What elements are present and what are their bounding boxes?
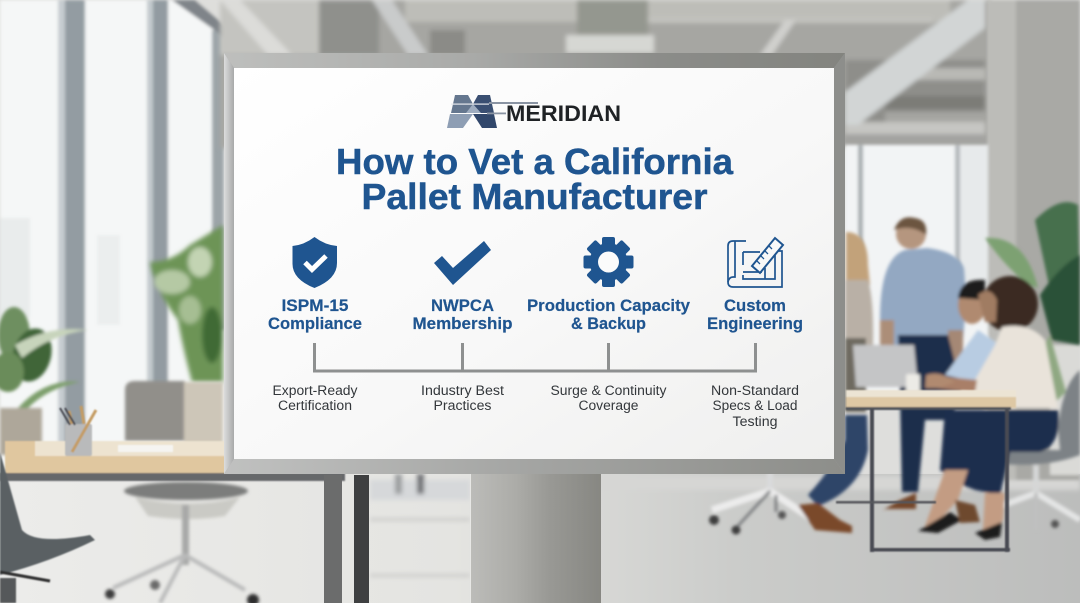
- title: How to Vet a California: [336, 141, 734, 182]
- back plant and chair: [125, 225, 223, 452]
- column: ISPM-15 Compliance: [268, 237, 362, 413]
- heading: ISPM-15 Compliance: ISPM-15: [282, 296, 348, 315]
- logo mark: [447, 95, 538, 128]
- description: Export-Ready Certification: [272, 383, 358, 413]
- standing man: [880, 217, 965, 510]
- description: Industry Best Practices: Industry Best: [421, 383, 504, 398]
- description: Non-Standard Specs and Load Testing: [711, 383, 799, 429]
- heading: Production Capacity and Backup: [527, 296, 691, 333]
- logo wordmark: MERIDIAN: [506, 101, 621, 126]
- logo: Meridian: [447, 95, 621, 128]
- left desk with pencil cup: [0, 406, 369, 603]
- title: Pallet Manufacturer: [362, 176, 708, 217]
- heading: NWPCA Membership: [412, 296, 512, 333]
- heading: Custom Engineering: Custom: [724, 296, 786, 315]
- foreground chair: [0, 452, 95, 603]
- description: Non-Standard Specs and Load Testing: Non-Standard: [711, 383, 799, 398]
- ceiling: [220, 0, 990, 148]
- heading: Production Capacity and Backup: Production Capacity: [527, 296, 691, 315]
- woman left: [846, 232, 870, 285]
- description: Industry Best Practices: Practices: [434, 398, 492, 413]
- display frame: [224, 53, 845, 474]
- seated man: [958, 286, 986, 324]
- screen panel: [234, 68, 834, 459]
- seated woman: [982, 276, 1038, 332]
- meeting table: [836, 390, 1016, 552]
- right chair: [985, 370, 1080, 465]
- left windows: [0, 0, 240, 535]
- description: Surge and Continuity Coverage: Coverage: [578, 398, 638, 413]
- icon: check mark: [434, 241, 491, 285]
- connector bracket: [314, 343, 756, 371]
- description: Export-Ready Certification: Export-Ready: [272, 383, 358, 398]
- icon: gear: [584, 237, 634, 287]
- heading: ISPM-15 Compliance: Compliance: [268, 314, 362, 333]
- heading: NWPCA Membership: NWPCA: [431, 296, 494, 315]
- column: NWPCA Membership: [412, 241, 512, 413]
- description: Non-Standard Specs and Load Testing: Testing: [732, 414, 778, 429]
- heading: ISPM-15 Compliance: [268, 296, 362, 333]
- description: Surge and Continuity Coverage: Surge & Continuity: [550, 383, 667, 398]
- heading: Production Capacity and Backup: & Backup: [571, 314, 646, 333]
- meeting group: [709, 202, 1080, 552]
- description: Export-Ready Certification: Certification: [278, 398, 352, 413]
- description: Surge and Continuity Coverage: [550, 383, 667, 413]
- right windows and column: [845, 0, 1080, 480]
- title: [336, 141, 734, 217]
- heading: Custom Engineering: Engineering: [707, 314, 803, 333]
- desk legs: [324, 475, 342, 603]
- icon: shield with check: [292, 237, 337, 288]
- floor: [0, 474, 1080, 603]
- heading: NWPCA Membership: Membership: [412, 314, 512, 333]
- stool: [105, 482, 259, 603]
- heading: Custom Engineering: [707, 296, 803, 333]
- column: Custom Engineering: [707, 238, 803, 429]
- display stand post: [470, 474, 601, 603]
- description: Non-Standard Specs and Load Testing: Specs & Load: [712, 398, 798, 413]
- far chair base: [767, 472, 773, 490]
- left plant in pot: [0, 307, 88, 455]
- right plant: [985, 202, 1080, 405]
- column: Production Capacity and Backup: [527, 237, 691, 413]
- laptop: [853, 345, 918, 387]
- description: Industry Best Practices: [421, 383, 504, 413]
- icon: blueprint and ruler: [728, 238, 783, 287]
